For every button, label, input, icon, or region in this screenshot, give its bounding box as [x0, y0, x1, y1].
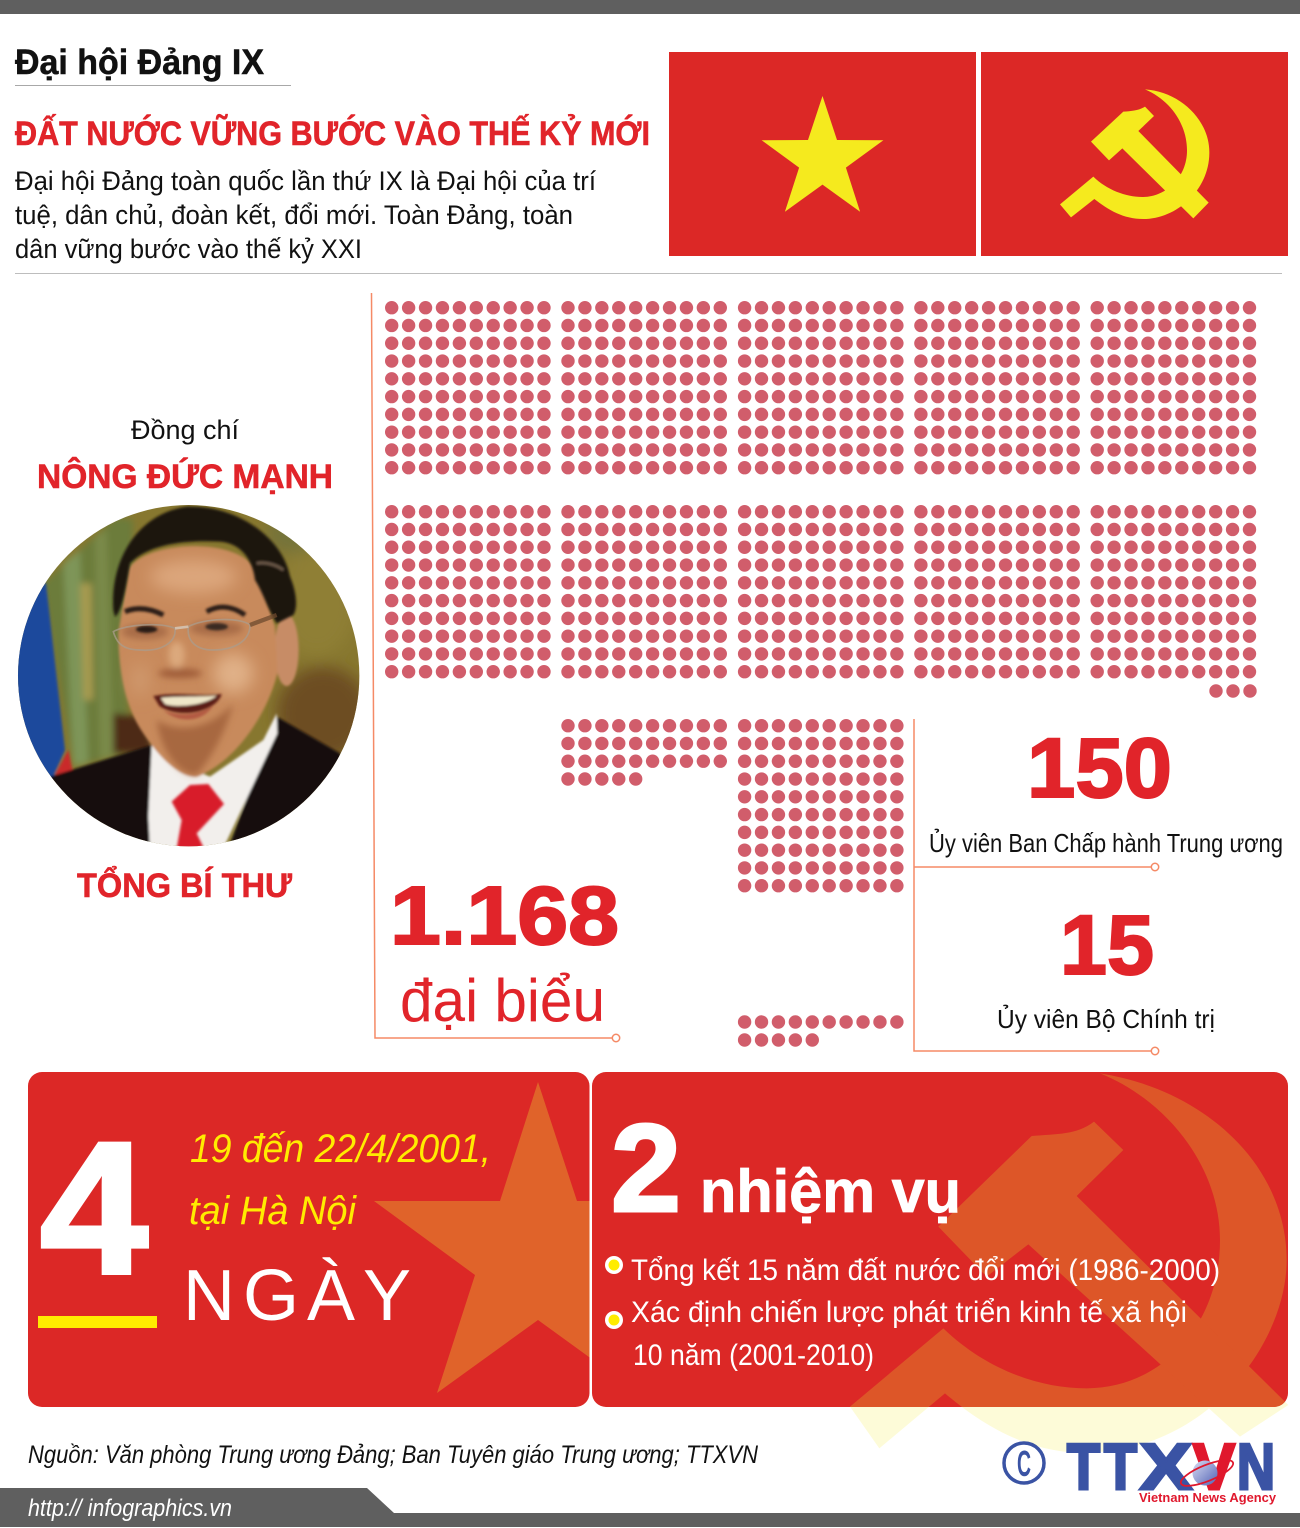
leader name: NÔNG ĐỨC MẠNH	[37, 457, 333, 496]
intro paragraph	[15, 166, 596, 264]
header block	[15, 43, 650, 264]
delegates count	[390, 869, 619, 1034]
logo: TTXVN: X	[1140, 1430, 1192, 1503]
left axis line	[372, 293, 620, 1042]
flag: national star	[669, 52, 976, 256]
top bar	[0, 0, 1300, 14]
dates and place: 19 đến 22/4/2001,	[190, 1127, 491, 1171]
bullet two: Xác định chiến lược phát triển kinh tế xã hội	[631, 1296, 1187, 1329]
stat: central committee	[929, 721, 1283, 858]
logo: TTXVN: N	[1237, 1430, 1275, 1503]
logo: TTXVN: V	[1193, 1430, 1235, 1503]
dates and place: tại Hà Nội	[189, 1189, 357, 1233]
flag: hammer and sickle	[981, 52, 1288, 256]
stat: central committee: 150	[1027, 721, 1172, 815]
yellow underline	[38, 1316, 157, 1328]
dates and place	[189, 1127, 491, 1233]
bottom bar with URL: http:// infographics.vn	[28, 1495, 232, 1522]
leader name block	[37, 415, 333, 905]
dot chart: politburo	[738, 1015, 904, 1047]
icon: copyright: C	[1017, 1443, 1031, 1484]
big number two: 2	[611, 1100, 681, 1238]
delegates count: 1.168	[390, 869, 619, 962]
stat: politburo: 15	[1060, 898, 1154, 992]
panel: duration	[28, 1072, 590, 1407]
watermark spill: hammer and sickle	[850, 1073, 1288, 1453]
stat: politburo: Ủy viên Bộ Chính trị	[997, 1003, 1215, 1034]
heading: congress name: Đại hội Đảng IX	[15, 43, 265, 82]
bullet two: 10 năm (2001-2010)	[633, 1339, 874, 1372]
logo: TTXVN: T	[1104, 1430, 1137, 1503]
big number four: 4	[40, 1103, 148, 1313]
bullet two	[605, 1296, 1187, 1372]
title: ĐẤT NƯỚC VỮNG BƯỚC VÀO THẾ KỶ MỚI	[15, 115, 650, 153]
source note: Nguồn: Văn phòng Trung ương Đảng; Ban Tuyên giáo Trung ương; TTXVN	[28, 1441, 759, 1469]
stat: politburo	[997, 898, 1215, 1034]
intro paragraph: dân vững bước vào thế kỷ XXI	[15, 234, 362, 264]
leader title: TỔNG BÍ THƯ	[77, 867, 293, 905]
logo: TTXVN	[1067, 1430, 1277, 1505]
leader name block: Đồng chí	[131, 415, 239, 445]
dot chart: delegates	[385, 301, 1257, 786]
dot chart: central committee	[738, 719, 904, 892]
panel: tasks	[592, 1072, 1288, 1407]
intro paragraph: Đại hội Đảng toàn quốc lần thứ IX là Đại hội của trí	[15, 166, 596, 196]
right connector lines	[914, 719, 1159, 1055]
bullet one: Tổng kết 15 năm đất nước đổi mới (1986-2000)	[631, 1254, 1220, 1287]
logo: TTXVN: T	[1067, 1430, 1100, 1503]
bottom bar with URL	[0, 1488, 1300, 1527]
portrait photo	[18, 505, 360, 846]
delegates label: đại biểu	[400, 967, 605, 1034]
days label: NGÀY	[183, 1256, 411, 1336]
icon: copyright	[1004, 1443, 1044, 1484]
logo: TTXVN: Vietnam News Agency	[1139, 1490, 1277, 1505]
tasks heading: nhiệm vụ	[700, 1158, 961, 1225]
intro paragraph: tuệ, dân chủ, đoàn kết, đổi mới. Toàn Đảng, toàn	[15, 200, 573, 230]
